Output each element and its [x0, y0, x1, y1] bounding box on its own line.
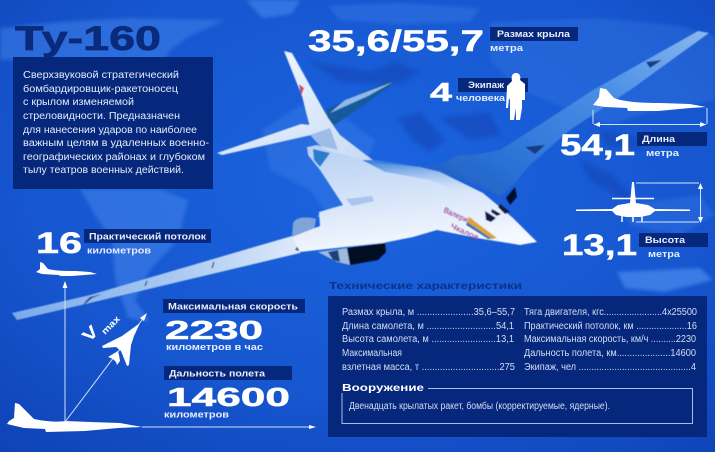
description text: Сверхзвуковой стратегический — [23, 70, 179, 81]
stat: service ceiling — [36, 227, 211, 260]
heading: specifications: Технические характеристики — [329, 281, 522, 292]
left wing — [12, 236, 305, 320]
stat: wingspan: Размах крыла — [497, 29, 571, 39]
stat: wingspan — [308, 25, 578, 58]
icon: front view with height dimension — [576, 182, 703, 223]
stat: range — [164, 366, 292, 420]
label: V max: max — [99, 314, 122, 336]
icon: top view delta aircraft — [102, 323, 140, 366]
description text — [23, 70, 209, 176]
arrow: range — [142, 425, 316, 429]
stat: length: Длина — [642, 134, 676, 144]
description text: бомбардировщик-ракетоносец — [23, 83, 178, 95]
armament box — [342, 383, 692, 424]
stat: maximum speed: Максимальная скорость — [168, 302, 299, 312]
stat: service ceiling: 16 — [36, 227, 82, 260]
left column: Длина самолета, м ...........................54,1 — [342, 321, 514, 332]
upper body shading — [362, 160, 483, 196]
engine intakes — [318, 248, 350, 265]
stat: length: 54,1 — [560, 129, 635, 162]
stat: range: километров — [164, 410, 230, 420]
aircraft name: Чкалов — [449, 222, 480, 242]
fuselage — [292, 145, 537, 252]
world map — [0, 0, 715, 322]
description text: географических районах и глубоком — [23, 151, 205, 163]
stat: range: 14600 — [167, 382, 290, 412]
right column: Тяга двигателя, кгс.......................4х25500 — [524, 307, 697, 318]
icon: side view with length dimension — [593, 88, 707, 127]
description text: важным целям в удаленных военно- — [23, 138, 209, 149]
stat: maximum speed — [163, 299, 305, 352]
stat: crew: Экипаж — [468, 80, 505, 90]
stat: wingspan: метра — [490, 43, 524, 53]
ribbon stripes — [467, 217, 497, 239]
panel: specifications — [328, 296, 707, 437]
near stabilizer — [217, 124, 330, 155]
armament box: Двенадцать крылатых ракет, бомбы (корректируемые, ядерные). — [349, 400, 610, 412]
label: V max — [78, 314, 122, 346]
armament box: Вооружение — [342, 383, 425, 394]
stat: service ceiling: Практический потолок — [89, 232, 207, 242]
icon: small aircraft — [36, 262, 97, 276]
left column: Высота самолета, м .........................13,1 — [342, 334, 514, 345]
stat: service ceiling: километров — [87, 246, 152, 256]
right column: Практический потолок, км ....................16 — [524, 321, 697, 332]
right wing — [423, 31, 709, 197]
stat: crew: 4 — [430, 77, 453, 107]
left column — [342, 307, 515, 373]
wing root fairing — [346, 196, 374, 206]
description text: для нанесения ударов по наиболее — [23, 124, 197, 136]
description text: стреловидности. Предназначен — [23, 111, 180, 122]
aircraft name: Валерий — [442, 206, 473, 226]
stat: maximum speed: 2230 — [165, 315, 263, 345]
right column: Максимальная скорость, км/ч ..........2230 — [524, 334, 696, 345]
description text: с крылом изменяемой — [23, 97, 134, 108]
tail fin — [284, 51, 378, 164]
stat: crew — [430, 77, 528, 107]
stat: wingspan: 35,6/55,7 — [308, 25, 484, 58]
right column: Дальность полета, км.....................14600 — [524, 348, 696, 359]
engine nacelles — [292, 217, 316, 240]
left column: Максимальная — [342, 348, 402, 359]
right column: Экипаж, чел ............................................4 — [524, 362, 696, 373]
stat: range: Дальность полета — [169, 368, 266, 378]
left column: Размах крыла, м ......................35,6–55,7 — [342, 307, 515, 318]
arrow: climb — [62, 281, 68, 422]
stat: height — [562, 229, 708, 262]
stat: crew: человека — [456, 93, 506, 103]
far stabilizer — [326, 81, 393, 126]
stat: maximum speed: километров в час — [166, 342, 263, 352]
cockpit windows — [485, 204, 510, 222]
stat: height: 13,1 — [562, 229, 637, 262]
right column — [524, 307, 697, 373]
rear nozzle — [313, 149, 330, 167]
icon: large aircraft — [7, 403, 142, 432]
panel: description — [13, 57, 213, 189]
label: V max: V — [78, 321, 103, 346]
arrow: speed vector — [65, 313, 147, 422]
stat: height: метра — [648, 249, 681, 259]
stat: length — [560, 129, 707, 162]
left column: взлетная масса, т ..............................275 — [342, 362, 515, 373]
aircraft photo — [12, 31, 709, 320]
title: Ту-160 — [15, 20, 161, 58]
icon: crew member — [506, 73, 525, 120]
aircraft name — [442, 206, 480, 242]
description text: тылу театров военных действий. — [23, 165, 184, 176]
stat: length: метра — [646, 148, 680, 158]
stat: height: Высота — [645, 235, 686, 245]
